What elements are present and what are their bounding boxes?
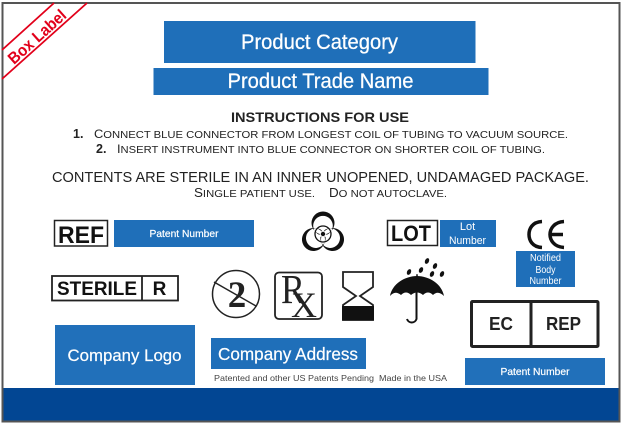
do not reuse icon: 2 [228,275,246,316]
heading: Product Trade Name [154,68,488,95]
bottom band [3,388,619,421]
patent number box: Patent Number [150,228,219,240]
lot number box: Number [449,235,486,247]
heading: Product Category: Product Category [241,31,398,54]
instructions for use: INSTRUCTIONS FOR USE [231,109,409,125]
heading: Product Trade Name: Product Trade Name [228,70,414,93]
company logo box: Company Logo [68,346,182,365]
patent footnote: Made in the USA [379,373,447,383]
sterile statement: DO NOT AUTOCLAVE. [329,186,447,200]
corner ribbon: Box Label: Box Label [5,6,70,68]
instructions for use: 1. [73,127,83,141]
biohazard icon [298,212,348,255]
heading: Product Category [164,21,476,63]
patent number box [114,220,254,247]
notified body number box: Body [536,265,556,276]
sterile statement [52,170,589,200]
instructions for use: 2. [96,142,106,156]
notified body number box: Notified [530,253,561,264]
company logo box [55,325,195,385]
Rx icon: X [291,285,317,325]
Rx icon: R [281,266,306,312]
company address box: Company Address [218,344,358,364]
LOT symbol: LOT [391,221,432,246]
STERILE R symbol: STERILE [57,279,137,300]
lot number box: Lot [460,221,475,233]
patent number box [465,358,605,385]
STERILE R symbol: R [153,279,167,300]
patent footnote [214,373,447,383]
STERILE R symbol [52,276,178,300]
REF symbol: REF [58,222,104,249]
patent footnote: Patented and other US Patents Pending [214,373,374,383]
instructions for use: INSERT INSTRUMENT INTO BLUE CONNECTOR ON SHORTER COIL OF TUBING. [117,142,545,156]
company address box [211,338,366,369]
sterile statement: SINGLE PATIENT USE. [194,186,315,200]
do not reuse icon [212,270,260,318]
instructions for use [73,109,568,156]
lot number box [440,220,496,247]
hourglass icon [342,272,374,320]
EC REP symbol [472,301,598,347]
Rx icon [275,266,322,325]
sterile statement: CONTENTS ARE STERILE IN AN INNER UNOPENED, UNDAMAGED PACKAGE. [52,170,589,186]
EC REP symbol: REP [546,314,581,334]
CE mark [529,222,564,248]
patent number box: Patent Number [500,366,570,378]
umbrella and rain icon [390,257,445,322]
notified body number box [516,251,575,287]
notified body number box: Number [530,276,562,287]
instructions for use: CONNECT BLUE CONNECTOR FROM LONGEST COIL OF TUBING TO VACUUM SOURCE. [94,127,568,141]
EC REP symbol: EC [489,314,513,334]
